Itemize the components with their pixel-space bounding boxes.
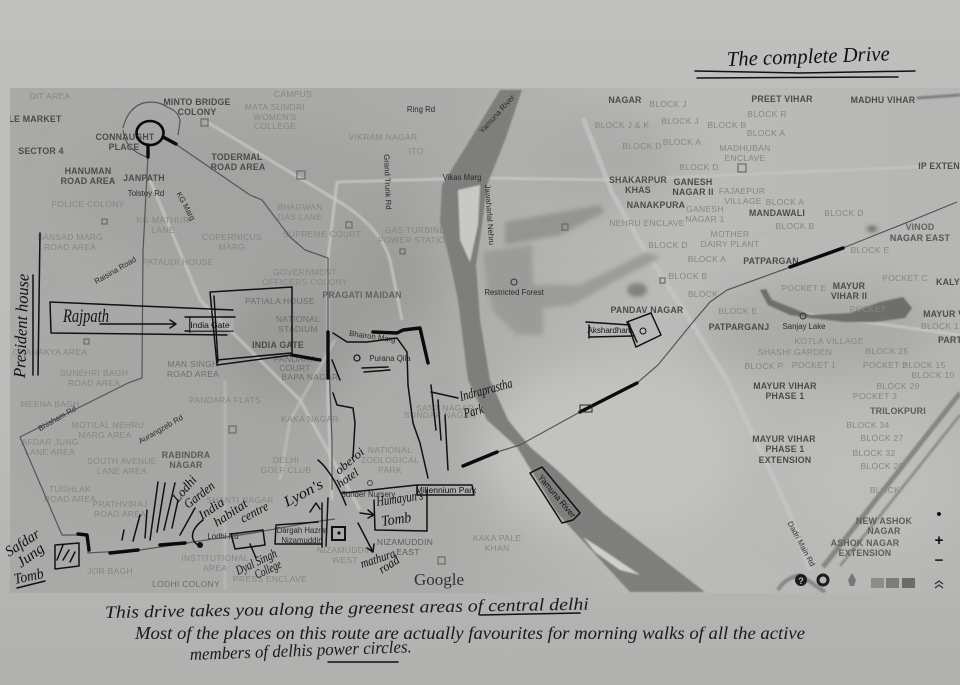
map labels: east: BLOCK 10 [911,370,955,380]
Indraprastha Park note [431,376,514,470]
Humayun's Tomb: Tomb [380,510,413,530]
map labels: east: BLOCK 29 [876,381,920,391]
map labels: west: PATAUDI HOUSE [142,257,214,267]
map labels: east: IP EXTEN [918,161,960,171]
map labels: west [8,89,481,589]
map controls: • [936,506,942,523]
map labels: west: ROAD AREA [68,378,120,388]
map labels: east: NAGAR 1 [685,214,725,224]
map labels: west: SUNEHRI BAGH [60,368,128,378]
Akshardham label and box: Akshardham [588,326,633,335]
Lodhi Garden note and hatching: Lodhi [168,472,200,506]
Google watermark: Google [414,570,464,589]
map labels: east: BLOCK 32 [852,448,896,458]
map labels: east: Sanjay Lake [783,322,825,331]
map labels: east: BLOCK P [745,361,784,371]
map labels: west: GOVERNMENT [273,267,337,277]
map labels: east: VIHAR II [831,291,867,301]
map labels: east: BLOCK A [747,128,785,138]
map labels: east: MANDAWALI [749,208,805,218]
India Habitat Centre note: centre [237,498,271,526]
map labels: east: PHASE 1 [765,391,805,401]
Safdarjung Tomb: Jung [14,540,48,571]
map labels: east: KAKA PALE [473,533,521,543]
map labels: west: COLLEGE [254,121,296,131]
Millennium Park label [343,485,477,495]
map labels: east: BLOCK B [669,271,708,281]
map labels: east: PATPARGAN [743,256,799,266]
India Gate square [210,287,320,365]
map labels: east: BLOCK 27 [860,433,904,443]
map labels: east: BLOCK 28 [860,461,904,471]
map labels: east: PATPARGANJ [709,322,769,332]
map labels: west: NATIONAL [368,445,412,455]
map labels: east: Jawaharlal Nehru [483,184,496,245]
Mathura road note: mathura [358,545,398,571]
map labels: east: KHAN [485,543,509,553]
Safdarjung Tomb: Tomb [13,566,46,588]
map labels: east: Yamuna River [477,93,517,135]
map labels: east: POCKET E [781,283,827,293]
map labels: east: BLOCK E [851,245,890,255]
map labels: west: ITO [409,146,424,156]
map labels: west: POWER STATION [378,235,452,245]
map labels: east: NANAKPURA [627,200,686,210]
map labels: west: MARG AREA [78,430,132,440]
map labels: west: DAS LANE [278,212,322,222]
map labels: west: KAKA NAGAR [281,414,339,424]
map labels: west: NAGAR [169,460,203,470]
map labels: west: ROAD AREA [61,176,116,186]
map labels: west: HANUMAN [65,166,111,176]
Oberoi hotel note: oberoi [332,445,367,477]
Dyal Singh College [231,530,284,582]
map labels: west: Ring Rd [407,105,435,114]
map labels: west: Bhairon Marg [349,329,396,344]
map controls: + [935,532,944,549]
map labels: east: BLOCK 34 [846,420,890,430]
Dyal Singh College: College [252,556,284,582]
map labels: east: EXTENSION [839,548,891,558]
map labels: east: NEHRU ENCLAVE [609,218,685,228]
India Gate label [185,317,235,332]
map labels: east: POCKET 1 [792,360,836,370]
map labels: east: BLOCK D [824,208,864,218]
map labels: west: LODHI COLONY [152,579,220,589]
map labels: west: TUGHLAK [49,484,91,494]
Mathura road note: road [375,552,402,577]
map labels: east: MADHU VIHAR [851,95,916,105]
map labels: east: BLOCK 25 [865,346,909,356]
map labels: west: MAN SINGH [168,359,218,369]
drive route line [20,102,957,553]
President House note: President house [10,273,33,379]
India Habitat Centre note: habitat [210,496,251,529]
map labels: west: COPERNICUS [202,232,262,242]
map labels: west: PATIALA HOUSE [245,296,315,306]
India Gate label: India Gate [190,320,230,330]
map labels: east: BLOCK D [648,240,688,250]
thick route east of river [463,248,843,466]
map labels: east: POCKET [850,304,886,314]
map labels: west: PRAGATI MAIDAN [322,290,402,300]
map labels: east: KOTLA VILLAGE [794,336,864,346]
map labels: west: SECTOR 4 [18,146,64,156]
map labels: east: Dadri Main Rd [786,520,817,568]
map labels: west: KG MATHUR [136,215,190,225]
map labels: west: Vikas Marg [443,173,481,182]
map labels: west: PANDARA [274,354,316,364]
Oberoi hotel note: hotel [334,465,362,490]
map labels: west: PARK [378,465,402,475]
handwritten description [105,594,805,664]
map labels: west: JANPATH [123,173,165,183]
map labels: west: Grand Trunk Rd [382,154,393,210]
map labels: west: GOLF CLUB [261,465,311,475]
metro station squares and place markers [84,119,806,564]
map labels: east: BLOCK 15 [902,360,946,370]
map labels: east: BLOCK B [776,221,815,231]
map labels: west: PANDARA FLATS [189,395,261,405]
title: The complete Drive: The complete Drive [726,41,890,71]
map labels: east: BLOCK E [719,306,758,316]
map labels: west: ROAD AREA [44,242,96,252]
map labels: east [473,93,960,568]
map labels: east: BLOCK A [766,197,804,207]
map labels: west: MEENA BAGH [20,399,80,409]
map labels: west: Bhisham Rd [36,404,78,433]
map labels: west: AREA [203,563,227,573]
heavy stretches along Lodhi Road [78,534,185,553]
map labels: west: SANT NAGAR [416,403,474,413]
map labels: east: VINOD [906,222,934,232]
map controls: − [935,552,944,569]
map labels: west: Raisina Road [93,255,138,286]
map labels: west: SANSAD MARG [37,232,103,242]
map labels: west: Sunder Nursery [341,490,395,499]
handwritten description: Most of the places on this route are actually favourites for morning walks of all the active [134,623,805,643]
map labels: west: BAPA NAGAR [281,372,339,382]
map labels: east: POCKET 3 [853,391,897,401]
Yamuna river [440,90,705,592]
map labels: east: BLOCK [688,289,718,299]
Lodhi Garden note and hatching [122,472,217,541]
map labels: east: NAGAR [608,95,642,105]
map labels: east: BLOCK B [708,120,747,130]
map labels: west: INDIA GATE [252,340,304,350]
map labels: east: NAGAR II [672,187,714,197]
map labels: east: NEW ASHOK [856,516,913,526]
map labels: west: PRESS ENCLAVE [233,574,307,584]
India Habitat Centre note [193,494,271,548]
map labels: west: Tolstoy Rd [128,189,164,198]
map labels: west: Nizamuddin [281,536,323,545]
Connaught Place circle [136,121,176,157]
India Habitat Centre note: India [194,494,227,523]
map labels: east: POCKET 2 [863,360,907,370]
Sanjay Lake [760,289,912,322]
map labels: west: WEST [332,555,358,565]
map labels: west: MARG [219,242,245,252]
map labels: west: EAST [396,547,420,557]
map labels: east: ENCLAVE [724,153,766,163]
map labels: west: OFFICERS COLONY [262,277,348,287]
Yamuna River callout: Yamuna River [536,472,578,520]
Indraprastha Park note: Park [461,402,486,422]
map labels: east: MAYUR VIHAR [753,381,817,391]
Oberoi hotel note [318,445,367,505]
map labels: west: ROAD AREA [44,494,96,504]
map labels: east: Restricted Forest [484,288,545,297]
map labels: east: ASHOK NAGAR [831,538,900,548]
map labels: east: PHASE 1 [765,444,805,454]
map labels: west: DIT AREA [30,91,71,101]
map labels: east: VILLAGE [724,196,762,206]
light road network [150,118,960,590]
map labels: west: POLICE COLONY [51,199,125,209]
map labels: east: TRILOKPURI [870,406,926,416]
map labels: west: LANE [151,225,175,235]
map labels: east: SHAKARPUR [609,175,667,185]
map labels: west: CAMPUS [274,89,312,99]
Millennium Park label: Millennium Park [416,485,477,495]
map labels: west: ROAD AREA [211,162,266,172]
map labels: east: POCKET C [882,273,928,283]
map labels: east: SHASHI GARDEN [758,347,832,357]
map labels: east: DAIRY PLANT [701,239,759,249]
map labels: west: NIZAMUDDIN [377,537,433,547]
map labels: west: RABINDRA [162,450,211,460]
handwritten description: This drive takes you along the greenest areas of central delhi [105,594,589,622]
map labels: west: PLACE [109,142,139,152]
map labels: west: ZOOLOGICAL [361,455,419,465]
map labels: west: STADIUM [278,324,318,334]
map labels: west: Dargah Hazrat [277,526,328,535]
map labels: west: NIZAMUDDIN [317,545,373,555]
map labels: east: KHAS [625,185,651,195]
Humayun's Tomb: Humayun's [375,489,424,510]
map labels: east: GANESH [674,177,712,187]
map labels: west: SHANTI NAGAR [206,495,274,505]
map labels: east: BLOCK J [649,99,687,109]
map labels: west: Purana Qila [369,354,411,363]
map labels: west: JOR BAGH [87,566,133,576]
map controls: ? [798,576,804,586]
map labels: west: LE MARKET [8,114,62,124]
map labels: west: VIKRAM NAGAR [349,132,417,142]
map labels: east: BLOCK D [679,162,719,172]
map labels: west: CONNAUGHT [96,132,155,142]
map labels: west: SUNDAR NAGAR [404,410,476,420]
map labels: west: SOUTH AVENUE [87,456,157,466]
map labels: east: MAYUR VIHAR [752,434,816,444]
Lyon's and Nizamuddin marks [280,477,328,547]
Mathura road note [358,523,402,577]
map labels: west: Lodhi Rd [207,532,239,541]
map labels: east: KALY [936,277,960,287]
map labels: east: MADHUBAN [719,143,771,153]
map labels: east: BLOCK R [747,109,787,119]
map labels: east: PANDAV NAGAR [611,305,684,315]
map labels: west: COURT [279,363,311,373]
drive heavy stretch near Purana Qila [328,328,428,478]
map labels: west: DELHI [273,455,299,465]
map labels: east: NAGAR EAST [890,233,950,243]
map labels: east: BLOCK A [688,254,726,264]
Nizamuddin box [275,522,345,544]
map labels: west: MINTO BRIDGE [163,97,231,107]
map labels: west: COLONY [178,107,216,117]
railway / road double line, lower right [778,95,960,592]
Humayun's Tomb [360,489,427,531]
map labels: west: PRATHVIRAJ [92,499,148,509]
map labels: west: LANE AREA [25,447,75,457]
map labels: west: BHAGWAN [277,202,323,212]
Dyal Singh College: Dyal Singh [232,546,279,578]
map labels: east: BLOCK D [622,141,662,151]
Safdarjung Tomb: Safdar [2,526,43,560]
map labels: east: BLOCK A [663,137,701,147]
Lyon's and Nizamuddin marks: Lyon's [280,477,326,511]
map labels: east: PREET VIHAR [751,94,813,104]
map labels: east: BLOCK 1 [921,321,959,331]
map labels: west: Aurangzeb Rd [137,413,185,446]
restricted forest and park patches [483,205,877,335]
map labels: east: BLOCK [870,485,900,495]
Rajpath annotation [50,302,233,335]
map labels: east: GANESH [686,204,724,214]
map labels: east: BLOCK J [661,116,699,126]
map controls [795,506,944,588]
map labels: west: WOMEN'S [254,112,296,122]
map labels: east: MOTHER [711,229,749,239]
map labels: west: GAS TURBINE [385,225,445,235]
Lodhi Garden note and hatching: Garden [181,478,217,511]
map labels: west: ROAD AREA [167,369,219,379]
map labels: west: NATIONAL [276,314,320,324]
map labels: west: TODERMAL [211,152,263,162]
map labels: west: MATA SUNDRI [245,102,305,112]
map labels: west: AFDAR JUNG [21,437,79,447]
map labels: west: MOTILAL NEHRU [72,420,144,430]
map labels: east: EXTENSION [759,455,811,465]
map labels: east: MAYUR [833,281,866,291]
map labels: west: ROAD AREA [94,509,146,519]
Rajpath annotation: Rajpath [62,306,109,327]
President House note [10,233,40,379]
Akshardham label and box [586,313,661,347]
map labels: west: INSTITUTIONAL [181,553,249,563]
map labels: west: KG Marg [174,190,197,222]
map labels: west: SUPREME COURT [283,229,361,239]
map labels: east: FAJAEPUR [719,186,765,196]
map panel [8,88,960,593]
handwritten description: members of delhis power circles. [189,636,412,664]
map labels: west: LANE AREA [97,466,147,476]
Indraprastha Park note: Indraprastha [457,376,514,405]
map labels: east: NAGAR [867,526,901,536]
map labels: east: BLOCK J & K [595,120,649,130]
map labels: west: CHANAKYA AREA [13,347,87,357]
Safdarjung Tomb [2,526,79,588]
